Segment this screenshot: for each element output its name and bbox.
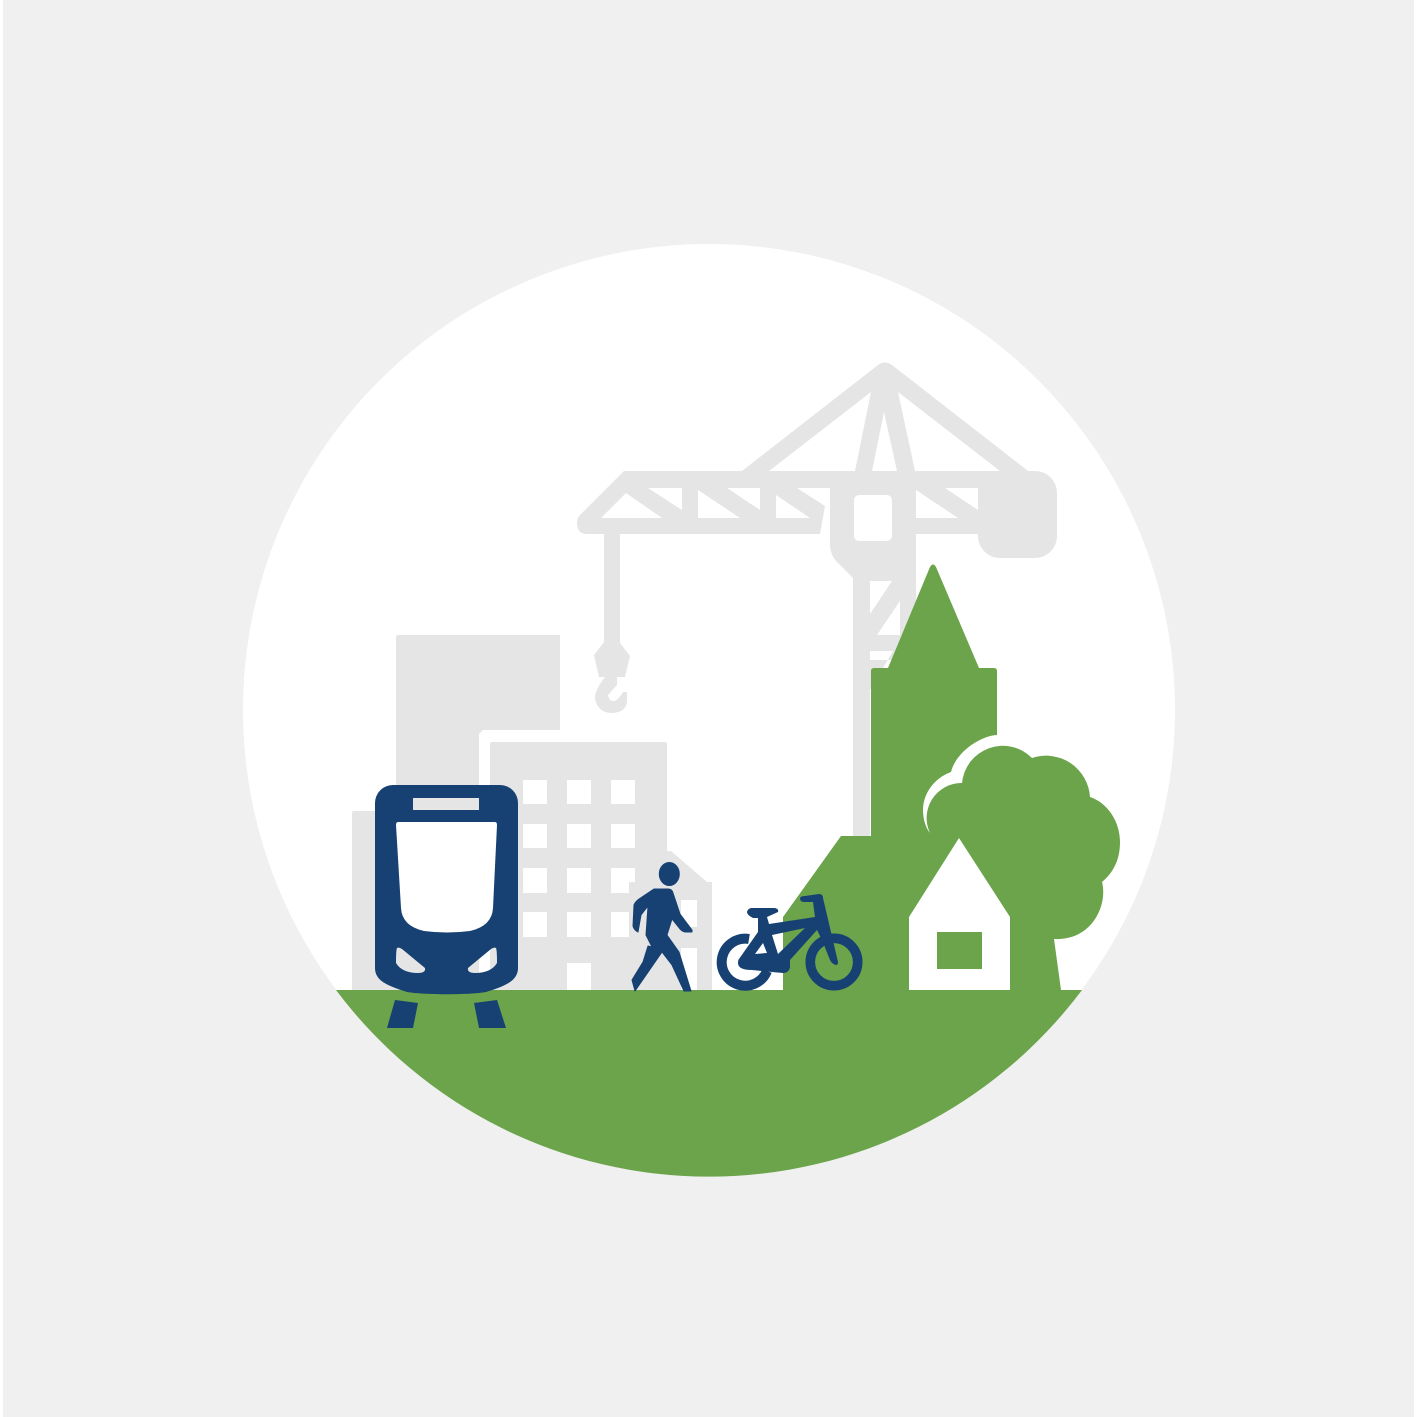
pedestrian [632, 862, 692, 991]
right rail [474, 1000, 506, 1028]
middle building with windows [490, 742, 712, 990]
bicycle [722, 894, 858, 986]
rear wheel [722, 939, 767, 986]
body [632, 889, 692, 991]
tram windshield [396, 822, 497, 932]
head [659, 862, 679, 886]
tower crane [577, 362, 1057, 713]
ground [336, 990, 1082, 1177]
white circle [243, 244, 1175, 1176]
buildings [352, 635, 712, 990]
frame, saddle and handlebar [738, 894, 838, 973]
left building [352, 811, 400, 990]
church and tree [783, 564, 1120, 990]
crane mast lower section [853, 650, 870, 836]
house [909, 838, 1010, 990]
tram body [375, 785, 518, 994]
left rail [387, 1000, 418, 1028]
tram destination sign [413, 798, 479, 810]
back tower [396, 635, 560, 990]
front wheel [810, 938, 858, 986]
tram [375, 785, 518, 1028]
